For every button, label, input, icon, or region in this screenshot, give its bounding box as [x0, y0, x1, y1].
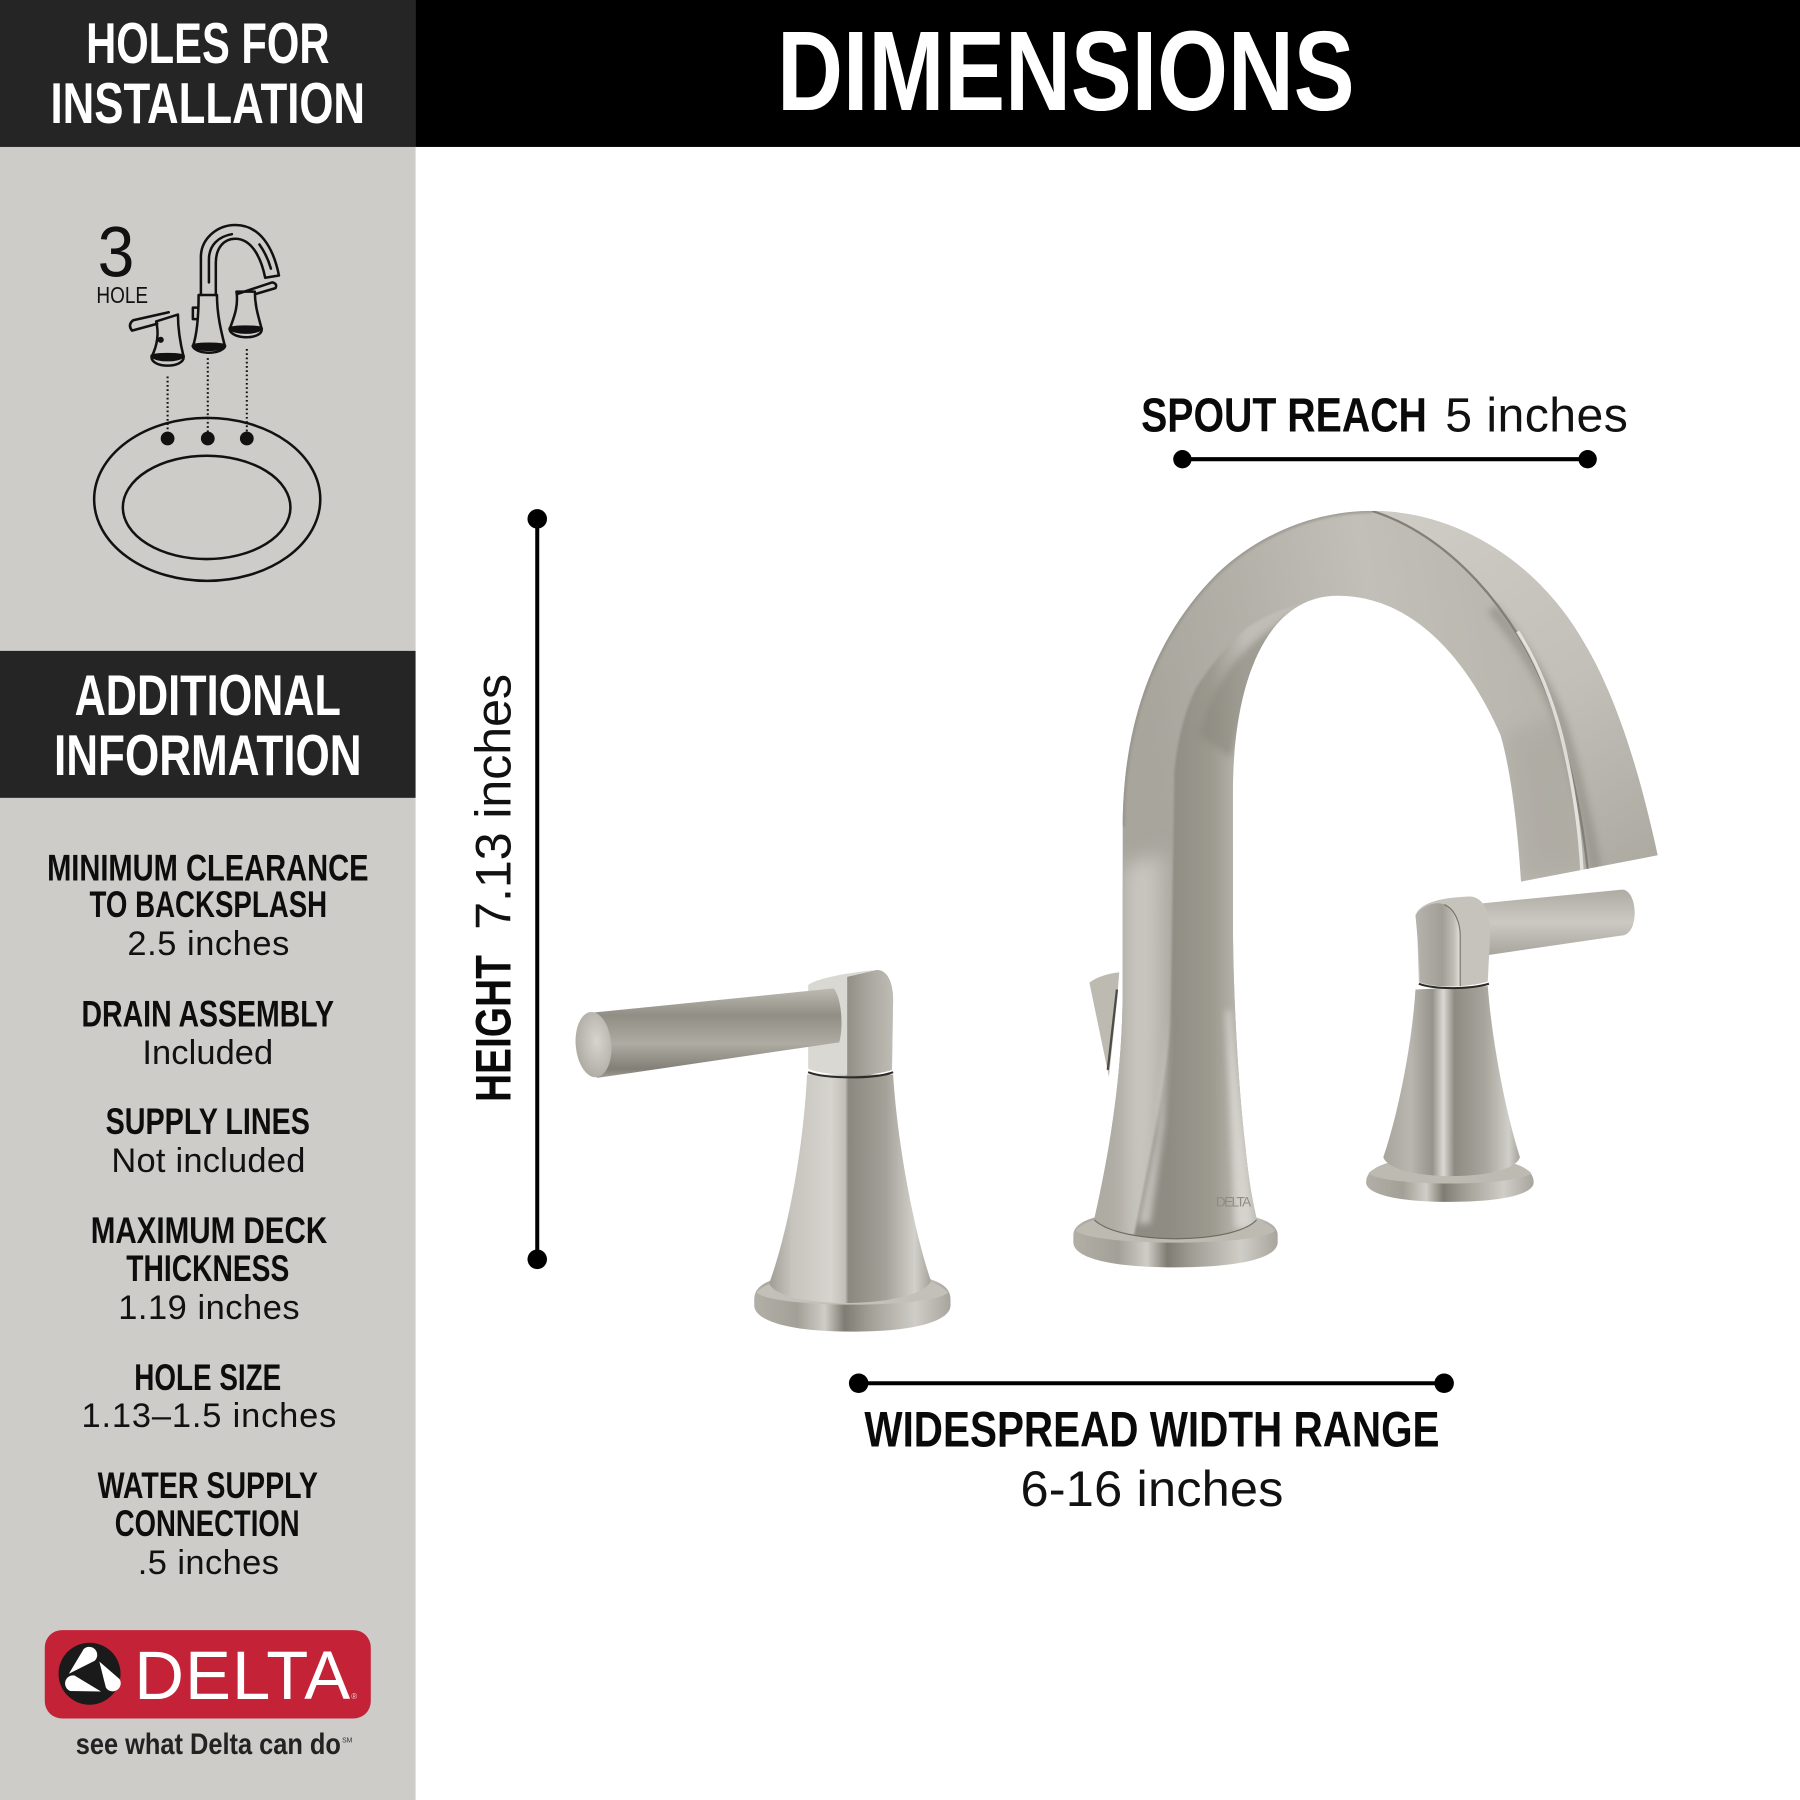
icon: mini spout	[193, 225, 279, 353]
logo: delta: ®	[351, 1692, 357, 1701]
heading: additional information	[0, 651, 416, 798]
icon: mini left handle	[130, 312, 184, 366]
dimension: widespread width range: WIDESPREAD WIDTH RANGE	[864, 1400, 1440, 1457]
faucet: right handle	[1366, 890, 1635, 1202]
right handle cone	[1383, 986, 1520, 1176]
title bar: dimensions	[416, 0, 1800, 147]
text block: water supply connection: .5 inches	[138, 1544, 279, 1582]
dimension: height: 7.13 inches	[464, 674, 521, 930]
inner arch shaded face	[1131, 596, 1337, 1251]
dimension: height: HEIGHT	[464, 955, 521, 1102]
icon: delta triangle mark	[65, 1647, 121, 1692]
dimension: spout reach: 5 inches	[1445, 389, 1628, 443]
text block: water supply connection	[98, 1465, 318, 1582]
text block: hole size: HOLE SIZE	[134, 1357, 281, 1398]
text block: maximum deck thickness: THICKNESS	[126, 1248, 289, 1289]
text block: hole size	[82, 1357, 336, 1435]
logo: delta	[45, 1630, 371, 1761]
faucet: left handle	[573, 970, 951, 1332]
dimension: spout reach: SPOUT REACH	[1141, 389, 1427, 443]
spout outer edge shade	[1123, 511, 1372, 827]
panel: left sidebar	[0, 0, 416, 1800]
text block: drain assembly	[82, 993, 334, 1072]
text block: minimum clearance to backsplash	[47, 847, 368, 963]
text block: water supply connection: CONNECTION	[115, 1503, 300, 1544]
icon: sink basin	[94, 418, 320, 581]
faucet: centre spout	[1073, 494, 1676, 1267]
heading: holes for installation: INSTALLATION	[51, 72, 365, 136]
text block: drain assembly: Included	[142, 1034, 273, 1072]
left handle cone	[769, 1074, 931, 1303]
text block: maximum deck thickness	[91, 1210, 328, 1327]
text block: water supply connection: WATER SUPPLY	[98, 1465, 318, 1506]
text block: minimum clearance to backsplash: 2.5 inches	[127, 925, 289, 963]
stem left band	[1094, 852, 1170, 1234]
dimension: height	[464, 509, 547, 1269]
label: 3 hole	[96, 214, 148, 308]
spout base ring	[1073, 1210, 1278, 1267]
heading: additional information: ADDITIONAL	[75, 664, 341, 728]
highlight streak on lower stem	[1137, 1046, 1170, 1227]
spout tip shade on front face	[1508, 728, 1576, 878]
engraved delta mark: DELTA	[1216, 1195, 1252, 1210]
right handle hub	[1415, 897, 1490, 988]
dark seam above base	[1094, 1220, 1257, 1239]
heading: additional information: INFORMATION	[54, 724, 362, 788]
text block: supply lines: Not included	[111, 1142, 305, 1180]
icon: mini right handle	[230, 282, 276, 337]
text block: supply lines	[106, 1101, 310, 1180]
label: 3 hole: HOLE	[96, 282, 148, 308]
dark shadow at arch crown	[1204, 620, 1280, 756]
left handle hub	[808, 970, 893, 1077]
logo: delta: SM	[342, 1738, 353, 1745]
icon: three hole faucet and sink diagram	[94, 214, 320, 581]
icon: dotted alignment lines	[168, 349, 247, 434]
heading: holes for installation: HOLES FOR	[86, 12, 329, 76]
lit band on right of lower stem	[1226, 1010, 1254, 1228]
text block: minimum clearance to backsplash: MINIMUM CLEARANCE	[47, 847, 368, 888]
label: 3 hole: 3	[98, 214, 134, 293]
text block: maximum deck thickness: 1.19 inches	[118, 1289, 300, 1327]
spout side face	[1372, 511, 1658, 869]
title bar: dimensions: DIMENSIONS	[777, 8, 1355, 135]
spout body	[1094, 510, 1658, 1240]
text block: minimum clearance to backsplash: TO BACKSPLASH	[90, 884, 327, 925]
text block: supply lines: SUPPLY LINES	[106, 1101, 310, 1142]
ridge line and highlight	[1372, 511, 1588, 869]
text block: drain assembly: DRAIN ASSEMBLY	[82, 993, 334, 1034]
text block: maximum deck thickness: MAXIMUM DECK	[91, 1210, 328, 1251]
dimension: widespread width range	[849, 1374, 1454, 1517]
logo: delta: see what Delta can do	[76, 1728, 341, 1761]
dimension: widespread width range: 6-16 inches	[1021, 1460, 1283, 1517]
right handle lever	[1481, 890, 1635, 955]
shadow right of ridge	[1492, 608, 1596, 869]
text block: hole size: 1.13–1.5 inches	[82, 1397, 336, 1435]
left handle base	[754, 1272, 951, 1332]
pop-up drain rod	[1089, 972, 1119, 1077]
dimension: spout reach	[1141, 389, 1628, 468]
left handle lever	[573, 988, 841, 1079]
icon: three mounting holes	[161, 432, 254, 445]
right handle base	[1366, 1157, 1534, 1202]
heading: holes for installation	[0, 0, 416, 147]
logo: delta: DELTA	[134, 1637, 350, 1714]
